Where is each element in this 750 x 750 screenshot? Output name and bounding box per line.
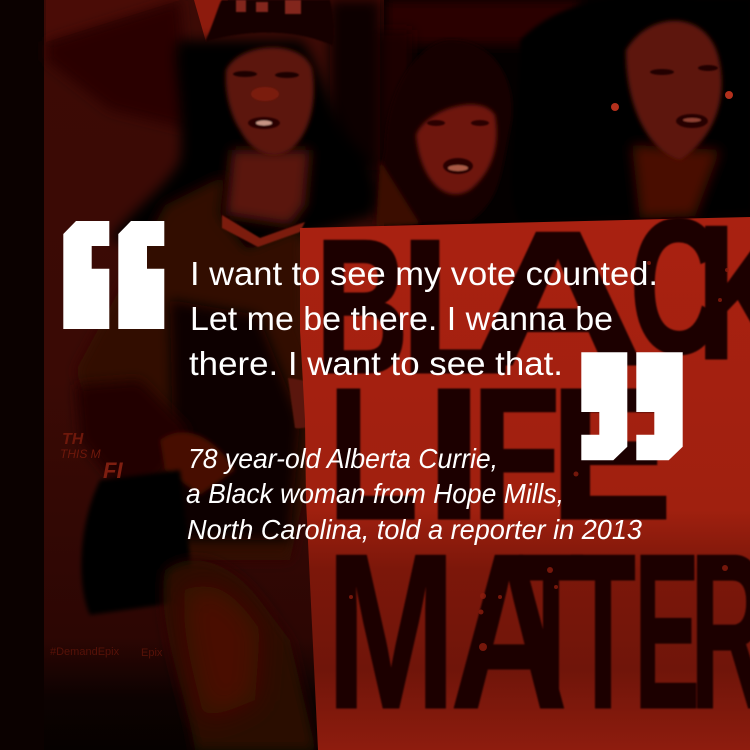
attribution text: a Black woman from Hope Mills, (186, 478, 564, 509)
poster fragment two: TH (62, 431, 84, 448)
hand at sign (288, 378, 330, 428)
sign word three: M (326, 508, 456, 750)
jacket dark chest (170, 300, 300, 540)
faint poster words (50, 431, 163, 659)
poster line: THIS M (60, 447, 101, 461)
backdrop top middle (385, 0, 580, 45)
woman one face (226, 47, 314, 155)
woman one hair (110, 40, 378, 260)
cap embroidery (236, 0, 301, 14)
sign word two (328, 351, 672, 558)
woman one jacket (76, 175, 330, 560)
upper backdrop (46, 0, 180, 42)
closing quotation mark (581, 352, 683, 460)
backdrop poster (44, 0, 384, 750)
woman two features (427, 120, 489, 174)
sign word one: L (400, 201, 510, 413)
attribution text: North Carolina, told a reporter in 2013 (187, 514, 642, 545)
attribution text (186, 443, 642, 545)
sign word two: L (328, 351, 418, 558)
jeans (163, 560, 316, 750)
opening quotation mark (63, 221, 164, 329)
top red wedge (194, 0, 228, 42)
poster handle: Epix (141, 647, 163, 659)
handbag (81, 470, 195, 615)
woman three features (650, 65, 718, 128)
poster fragment: FI (103, 458, 123, 483)
woman three face (626, 21, 722, 160)
woman two hair (381, 40, 512, 224)
dark left strip (0, 0, 44, 750)
dark area right of woman one (330, 0, 380, 170)
woman two shoulder (376, 160, 420, 226)
quote text: Let me be there. I wanna be (190, 300, 613, 337)
woman one cap (205, 0, 334, 46)
sign word one: A (470, 193, 646, 405)
sign word one: B (316, 201, 408, 413)
sign word two: I (426, 351, 482, 558)
sign lettering (316, 181, 750, 750)
quote text (189, 255, 658, 382)
sign word two: F (472, 351, 560, 558)
sign word three: T (518, 508, 584, 750)
sign word one (316, 181, 750, 413)
woman one arm and sleeve (76, 380, 190, 490)
attribution text: 78 year-old Alberta Currie, (188, 443, 498, 474)
earrings (611, 91, 733, 111)
jacket collar highlight (222, 215, 305, 247)
woman one neck and collar (225, 150, 310, 225)
quote text: there. I want to see that. (189, 345, 563, 382)
woman one eyes and mouth (233, 71, 299, 129)
sign word three (326, 508, 750, 750)
hand over bag (160, 432, 235, 495)
poster hashtag: #DemandEpix (50, 646, 120, 658)
woman two face (416, 104, 497, 194)
sign word three: A (450, 508, 568, 750)
quote text: I want to see my vote counted. (190, 255, 658, 292)
sign word three: T (570, 508, 636, 750)
jeans light (184, 586, 260, 720)
dark umbrella shape (46, 0, 190, 130)
paint splatter (349, 261, 729, 651)
backdrop behind woman two (372, 30, 412, 220)
woman three chest (632, 145, 720, 218)
protest sign board (300, 217, 750, 750)
sign word two: E (550, 351, 672, 558)
woman three hair (511, 0, 750, 222)
